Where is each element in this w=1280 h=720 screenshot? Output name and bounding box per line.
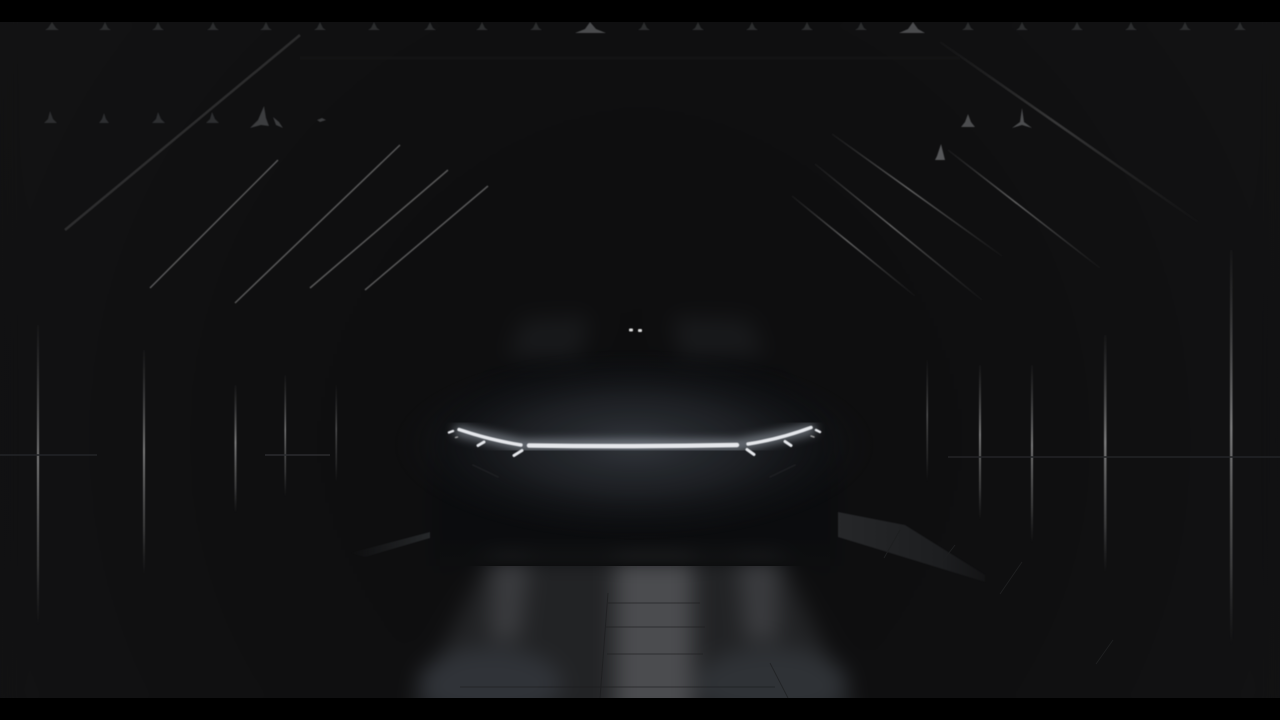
vertical wall lights: [37, 250, 1232, 645]
car underside edge: [440, 536, 830, 566]
light bar wide glow: [394, 350, 874, 540]
left roof beams: [65, 35, 488, 303]
floor pool: left: [418, 648, 562, 720]
light bar glow: [455, 428, 815, 445]
windshield left patch: [507, 316, 590, 358]
floor streak: left: [490, 560, 530, 640]
rearview lights: [629, 328, 642, 332]
right floor panel: [838, 512, 1113, 664]
floor pool: right: [696, 648, 848, 720]
ceiling lights: [44, 22, 1246, 160]
floor streak: right: [738, 560, 778, 640]
right roof beams: [792, 42, 1198, 300]
floor streak: centre: [615, 560, 693, 720]
floor base: [405, 560, 860, 720]
horizontal wall lines: [0, 58, 1280, 457]
light bar: [449, 428, 820, 477]
windshield right patch: [672, 316, 765, 358]
left floor highlight: [350, 532, 430, 557]
car body: [432, 358, 838, 566]
floor tile lines: [460, 593, 788, 698]
